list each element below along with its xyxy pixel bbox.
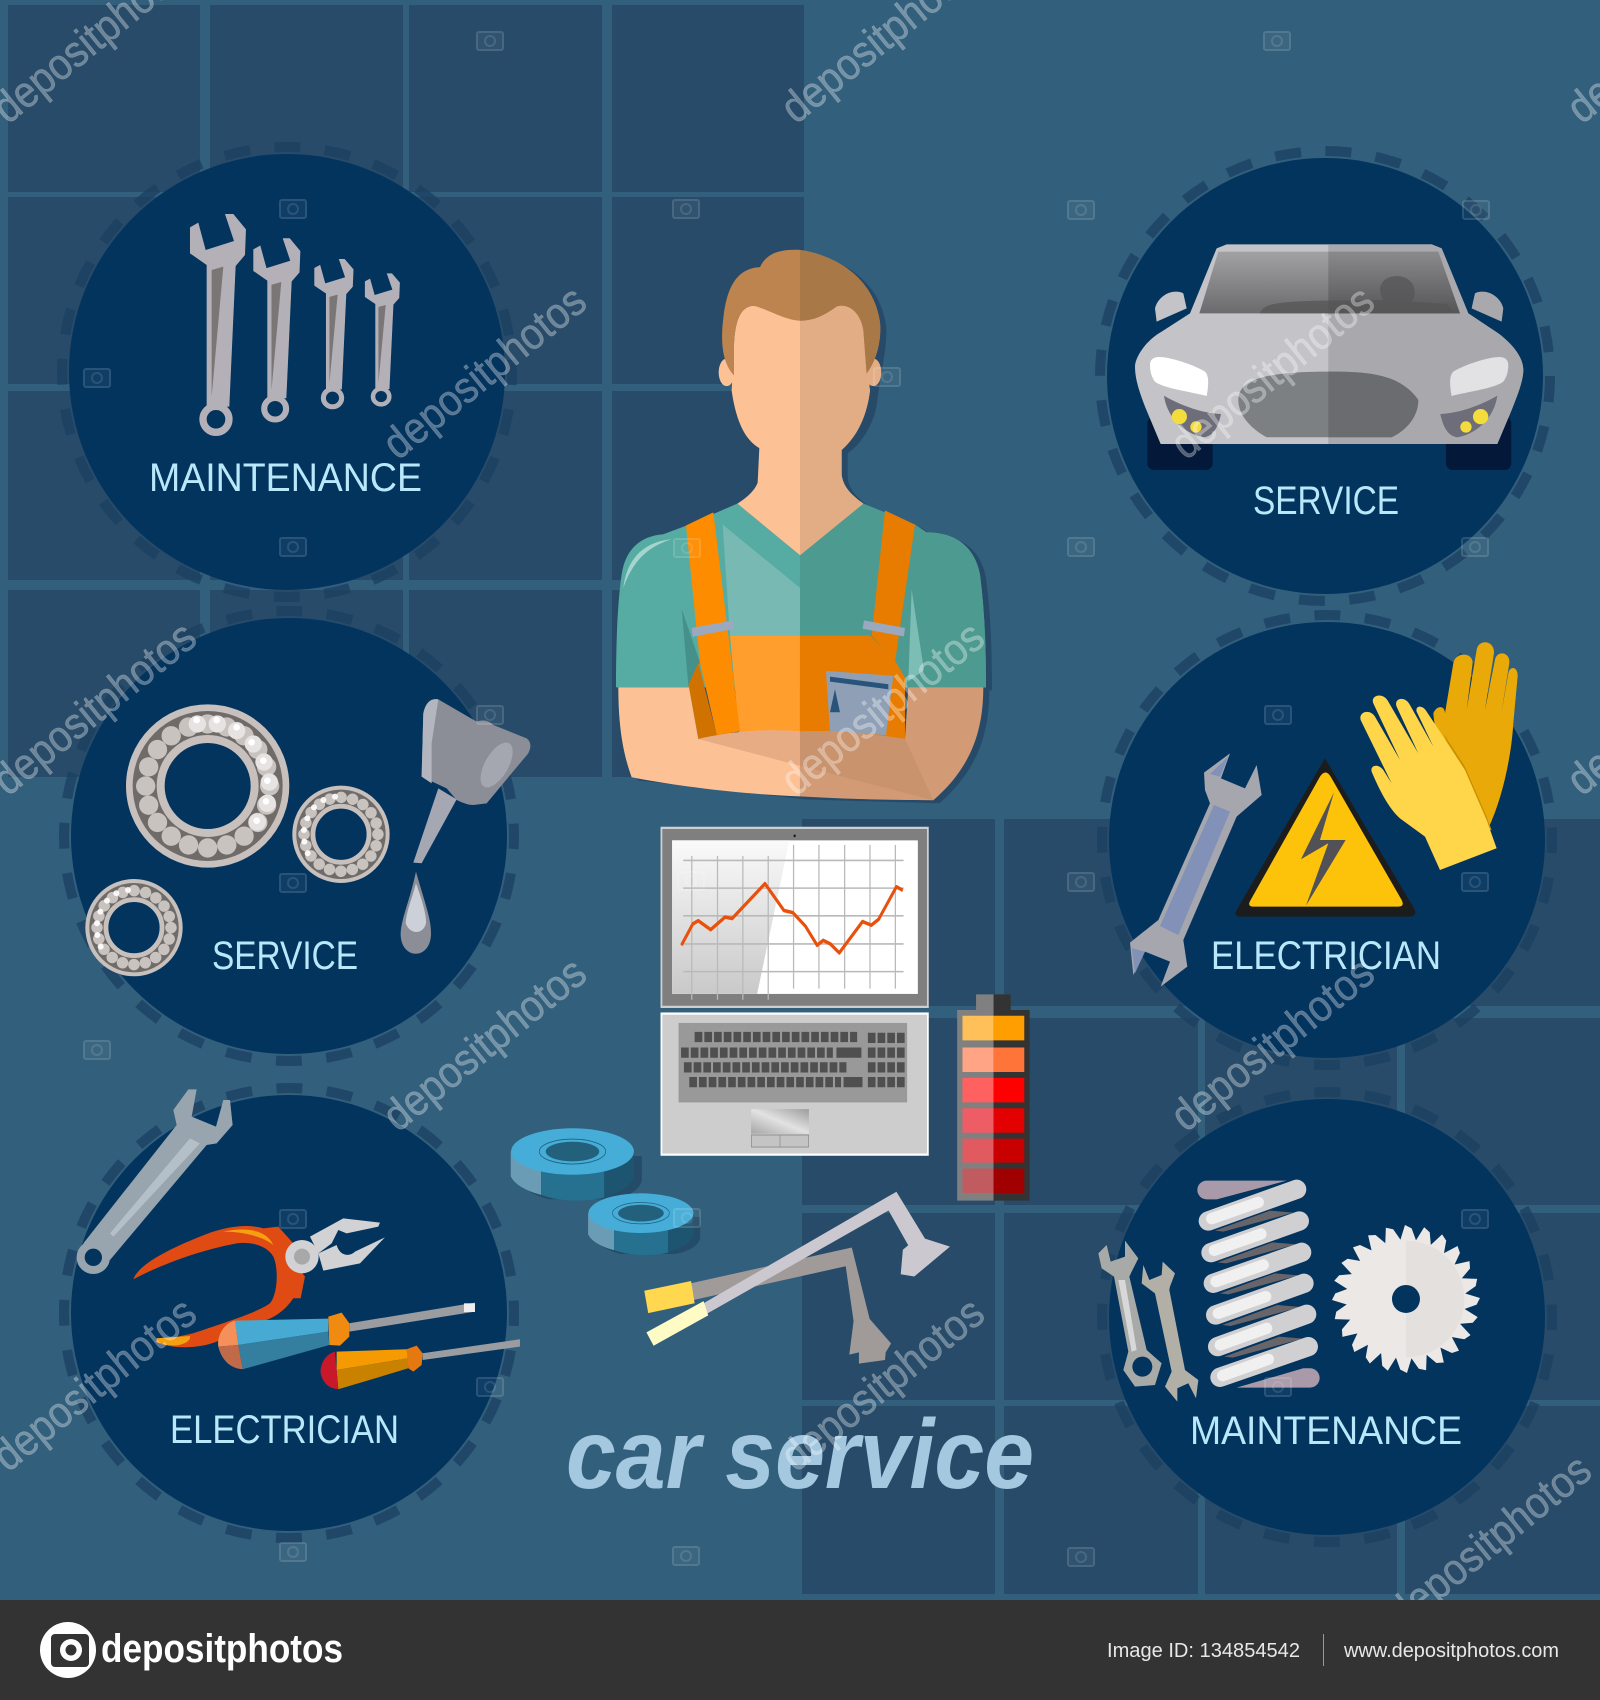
icon: car front [1135, 244, 1523, 470]
panel: electrician warning [1102, 615, 1552, 1065]
logo wordmark: depositphotos [101, 1627, 343, 1671]
watermarks: depositphotos [373, 948, 595, 1141]
icon: pliers, wrench, screwdrivers [81, 1089, 520, 1389]
site url: www.depositphotos.com [1343, 1640, 1559, 1662]
laptop keyboard [661, 1014, 928, 1155]
crossed arms [618, 687, 983, 800]
title: car service [566, 1399, 1034, 1509]
label: service: SERVICE [1253, 479, 1399, 523]
label: electrician: ELECTRICIAN [170, 1408, 399, 1452]
footer bar [0, 1600, 1600, 1700]
panel: maintenance wrenches [62, 147, 512, 597]
icon: wrench, warning sign, gloves [1130, 642, 1518, 987]
watermark camera icons [84, 32, 1489, 1566]
icon: bearings and oil can [87, 699, 530, 974]
watermarks: depositphotos [771, 612, 993, 805]
hair [722, 250, 880, 375]
insulating tape rolls [511, 1128, 700, 1255]
logo: camera in circle [40, 1622, 96, 1678]
watermarks: depositphotos [1161, 276, 1383, 469]
background grid: bottom right [802, 819, 1600, 1594]
label: service: SERVICE [212, 934, 358, 978]
overalls [686, 511, 915, 739]
label: maintenance: MAINTENANCE [149, 456, 422, 500]
watermarks: depositphotos [1161, 948, 1383, 1141]
panel: service bearings [64, 611, 530, 1061]
icon: wrenches, spring, saw blade [1098, 1181, 1481, 1402]
mechanic figure [616, 250, 992, 803]
background grid: top left [8, 5, 804, 777]
head and neck [719, 306, 881, 555]
panel: service car [1100, 151, 1550, 601]
center tools group [511, 828, 1030, 1364]
image id: Image ID: 134854542 [1107, 1640, 1300, 1662]
laptop screen with line chart [661, 828, 928, 1007]
panel: maintenance spring and saw [1098, 1092, 1552, 1542]
icon: four wrenches [190, 214, 400, 432]
label: maintenance: MAINTENANCE [1190, 1409, 1462, 1453]
battery [957, 994, 1030, 1201]
label: electrician: ELECTRICIAN [1211, 934, 1441, 978]
watermarks: depositphotos [373, 276, 595, 469]
panel: electrician tools [64, 1088, 520, 1538]
cable clips [644, 1192, 950, 1364]
watermarks: depositphotos [771, 1288, 993, 1481]
